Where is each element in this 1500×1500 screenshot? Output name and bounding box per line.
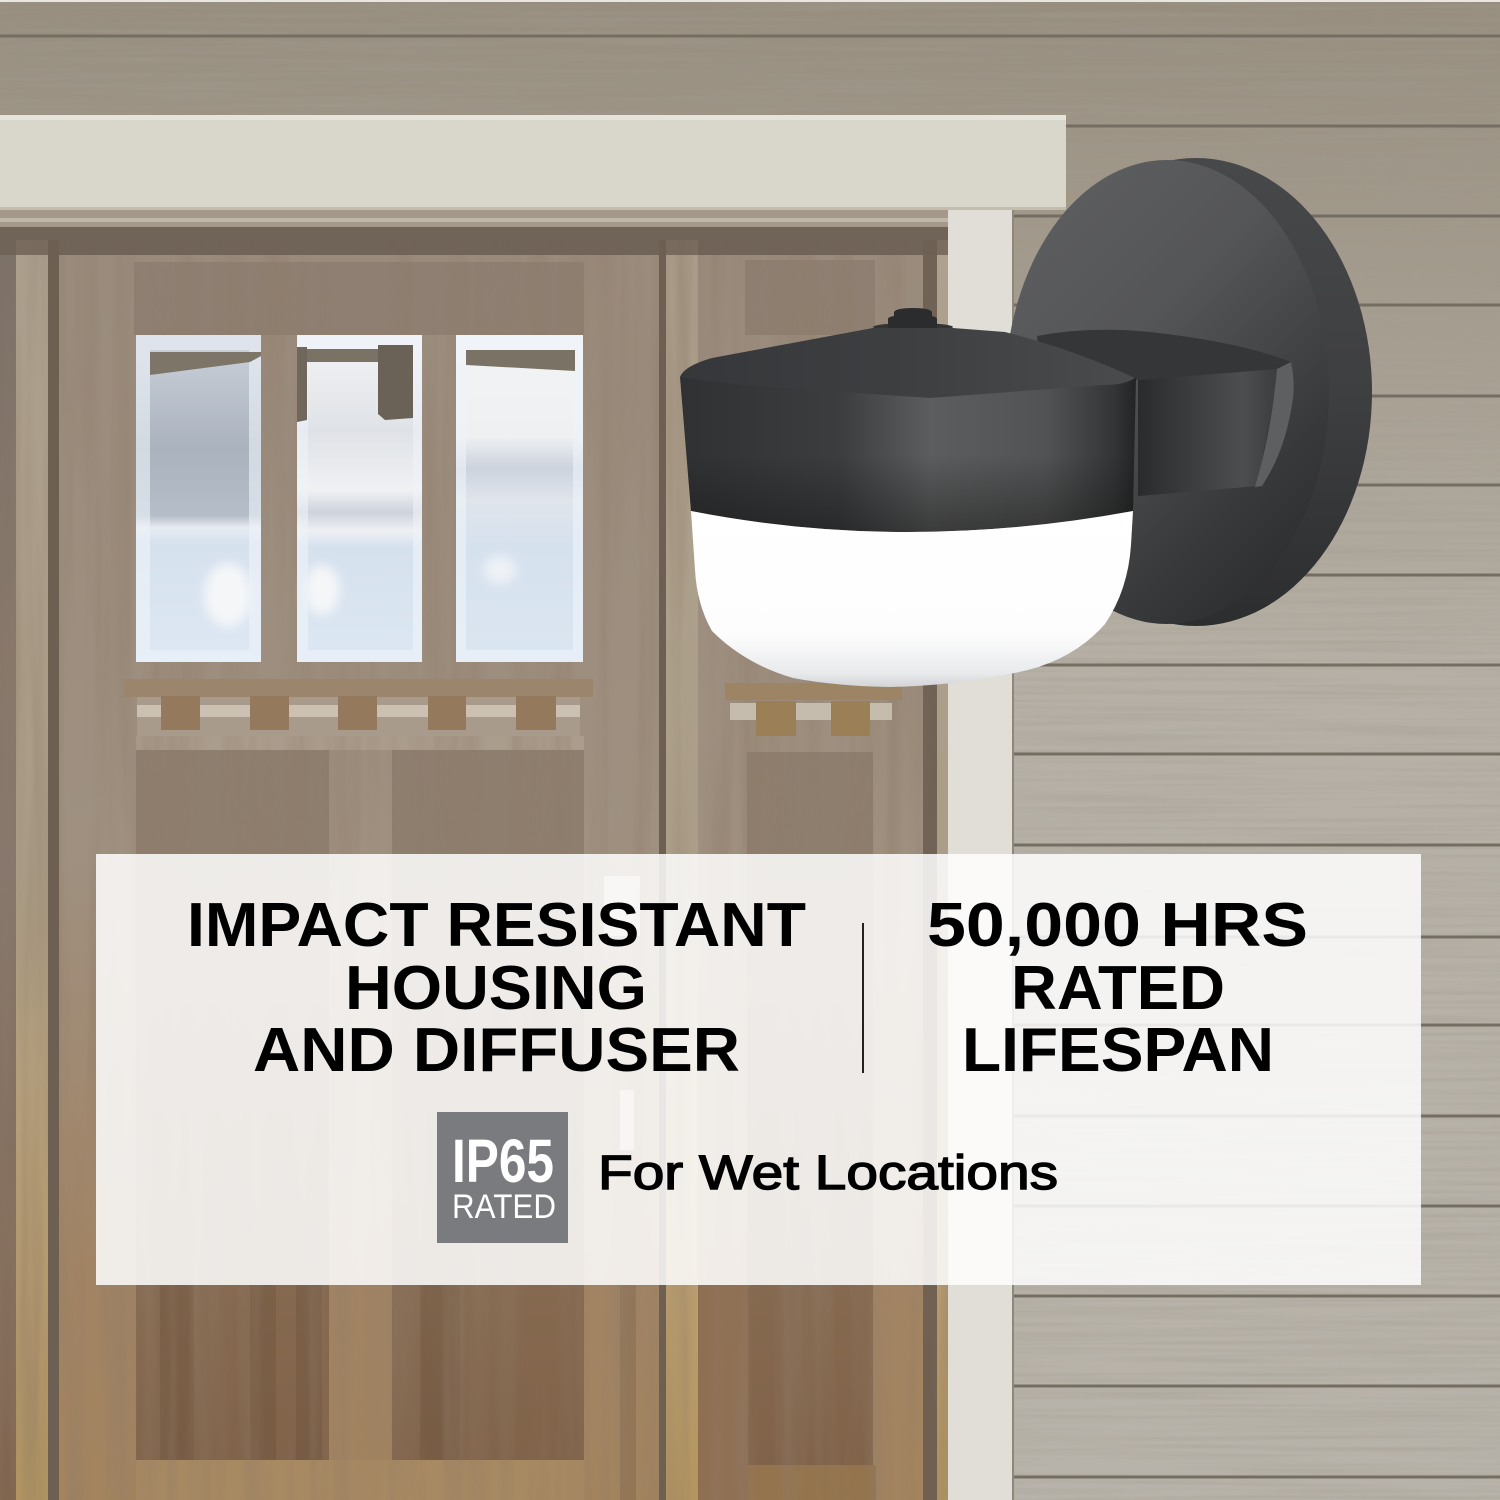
diffuser	[691, 511, 1133, 687]
door edge shadows	[0, 227, 948, 1500]
lamp housing band	[680, 377, 1136, 532]
badge: IP65 rated: RATED	[452, 1188, 556, 1226]
heading: rated lifespan: 50,000 HRS	[927, 891, 1308, 960]
door: main	[59, 255, 660, 1500]
badge: IP65 rated	[437, 1112, 568, 1243]
badge: IP65 rated: IP65	[452, 1127, 554, 1195]
lintel	[0, 115, 1066, 210]
wall light fixture	[680, 158, 1372, 687]
heading: impact resistant housing: AND DIFFUSER	[253, 1016, 740, 1085]
mounting plate face	[1005, 160, 1329, 624]
heading: impact resistant housing	[187, 891, 806, 1085]
heading: rated lifespan	[927, 891, 1308, 1085]
door handle reflection	[604, 876, 640, 1150]
heading: rated lifespan: RATED	[1011, 954, 1225, 1023]
door: side	[698, 255, 923, 1500]
heading: impact resistant housing: IMPACT RESISTANT	[187, 891, 806, 960]
heading: impact resistant housing: HOUSING	[345, 954, 647, 1023]
windows	[136, 335, 583, 662]
arm	[1037, 330, 1294, 496]
reflected roof	[150, 352, 261, 375]
lamp housing top	[680, 328, 1135, 398]
divider	[862, 923, 864, 1073]
glass bevels	[136, 335, 261, 662]
corner post	[948, 210, 1012, 1500]
sensor	[873, 308, 953, 331]
wood grain	[0, 240, 948, 1500]
label: wet locations: For Wet Locations	[598, 1147, 1058, 1200]
mounting plate rim	[1020, 158, 1372, 626]
heading: rated lifespan: LIFESPAN	[962, 1016, 1274, 1085]
recess	[0, 210, 948, 1500]
door surround	[0, 115, 1066, 1500]
side door shelf and corbels	[725, 683, 902, 736]
translucent info panel	[96, 854, 1421, 1285]
window shelf and corbels	[124, 679, 593, 736]
